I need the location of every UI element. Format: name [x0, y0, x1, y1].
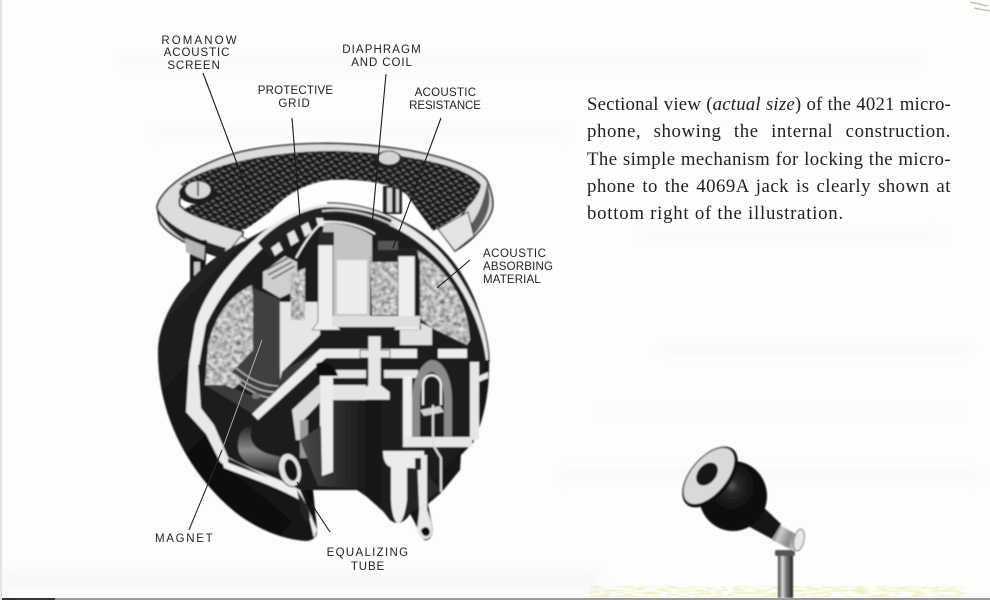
rear mounting post [383, 186, 402, 214]
right absorbing material [417, 250, 470, 345]
stand pole [778, 553, 793, 598]
lower frame plates [252, 336, 488, 522]
microphone cutaway illustration [157, 143, 493, 541]
ball housing silhouette [158, 210, 489, 541]
front flange [672, 437, 748, 517]
label: acoustic resistance: ACOUSTIC [415, 87, 476, 99]
description paragraph: bottom right of the illustration. [587, 203, 844, 224]
protective grid band [258, 207, 395, 258]
description paragraph: phone to the 4069A jack is clearly shown at [587, 176, 951, 197]
bottom edge of scan [0, 598, 990, 600]
label: Romanow acoustic screen: ROMANOW [161, 35, 239, 47]
label: protective grid: GRID [278, 98, 311, 110]
label: acoustic resistance: RESISTANCE [409, 100, 481, 112]
left page edge shadow [0, 0, 2, 600]
wire mesh screen [180, 151, 481, 231]
locking plug [383, 451, 432, 539]
left rim screw [179, 181, 217, 204]
U-shaped acoustic tube [412, 360, 452, 492]
label: equalizing tube: EQUALIZING [327, 547, 409, 559]
label: Romanow acoustic screen: SCREEN [167, 60, 221, 72]
neck [748, 502, 781, 539]
ball body [699, 461, 767, 531]
rim cut end [438, 212, 474, 251]
description paragraph [587, 94, 951, 224]
label: acoustic absorbing material: ABSORBING [483, 261, 553, 273]
sound opening [692, 458, 722, 490]
left absorbing material [205, 285, 256, 395]
label: magnet: MAGNET [155, 533, 214, 545]
description paragraph: The simple mechanism for locking the micro- [587, 149, 951, 170]
callout labels [155, 35, 553, 573]
interior cavity [190, 206, 488, 520]
description paragraph: Sectional view (actual size) of the 4021 micro- [587, 94, 951, 115]
label: equalizing tube: TUBE [351, 561, 385, 573]
small microphone on stand [672, 437, 806, 598]
label: acoustic absorbing material: ACOUSTIC [483, 248, 546, 260]
swivel barrel [772, 525, 801, 552]
upper pole section [290, 223, 421, 330]
label: acoustic absorbing material: MATERIAL [483, 274, 541, 286]
folded corner mark [970, 2, 990, 11]
dark corner of bottom edge [0, 598, 55, 600]
label: Romanow acoustic screen: ACOUSTIC [164, 47, 230, 59]
label: diaphragm and coil: AND COIL [351, 57, 413, 69]
cast shell section [186, 204, 489, 533]
centre threaded stud [360, 336, 390, 400]
label: protective grid: PROTECTIVE [258, 85, 333, 97]
equalizing tube [222, 427, 317, 538]
yellow paper discoloration strip [590, 586, 965, 597]
top rim screw [373, 151, 403, 169]
magnet body [205, 256, 320, 415]
description paragraph: phone, showing the internal construction. [587, 121, 951, 142]
label: diaphragm and coil: DIAPHRAGM [342, 44, 422, 56]
leader lines [189, 73, 470, 532]
acoustic screen rim [157, 143, 493, 290]
